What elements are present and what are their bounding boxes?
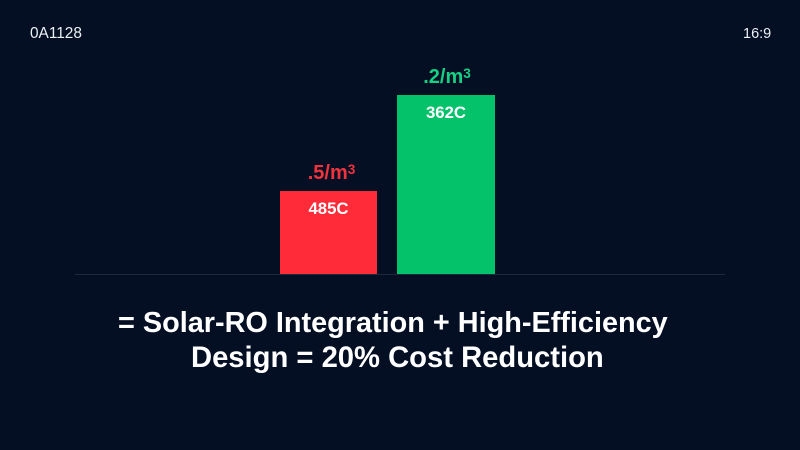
headline [118,307,668,374]
red bar label: 485C [308,199,349,218]
green bar value label: .2/m3 [423,66,471,88]
headline: Design = 20% Cost Reduction [191,342,604,374]
green bar label: 362C [426,103,466,122]
bar: red [280,191,377,274]
chart baseline [75,274,725,275]
corner label: aspect ratio: 16:9 [743,26,771,42]
red bar value label: .5/m3 [308,162,355,184]
headline: = Solar-RO Integration + High-Efficiency [118,307,668,339]
bar: green [397,95,495,274]
corner label: id code: 0A1128 [30,25,82,42]
